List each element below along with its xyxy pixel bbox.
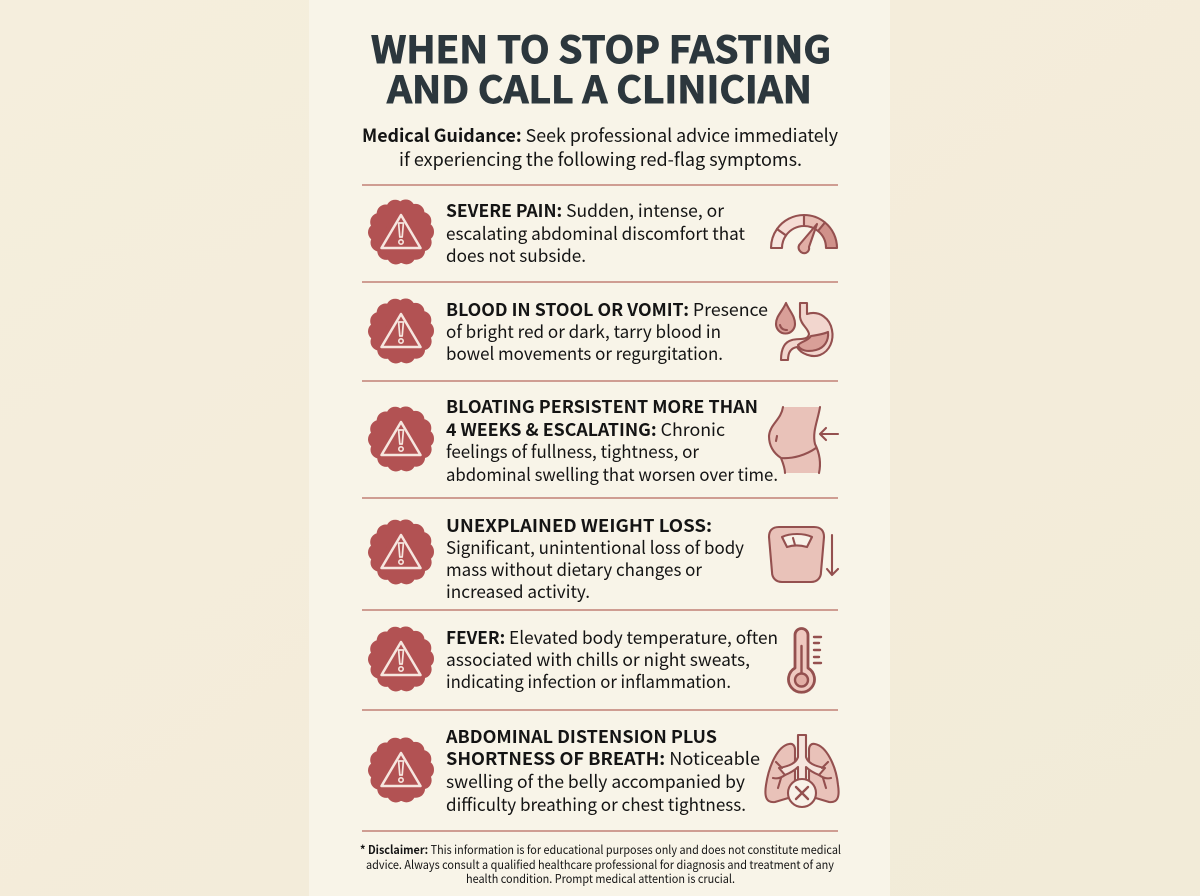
text: blood in stool or vomit: of bright red or dark, tarry blood in (446, 319, 721, 344)
icon: scale with down arrow (769, 527, 838, 582)
intro text: medical guidance (362, 122, 839, 172)
text: bloating (446, 394, 778, 487)
text: severe pain: does not subside. (446, 243, 586, 268)
icon: warning badge (370, 202, 432, 262)
text: distension and breath (445, 724, 760, 817)
text: fever (446, 625, 778, 694)
disclaimer (360, 841, 841, 887)
text: blood in stool or vomit: bowel movements or regurgitation. (446, 341, 723, 366)
icon: lungs with cross (765, 735, 839, 807)
disclaimer: * Disclaimer: This information is for educational purposes only and does not constitute medical (360, 841, 841, 858)
title: WHEN TO STOP FASTING (371, 20, 831, 74)
icon: warning badge (370, 408, 432, 470)
text: distension and breath: ABDOMINAL DISTENSION PLUS (445, 724, 717, 749)
text: fever: FEVER: Elevated body temperature, often (446, 625, 778, 650)
text: distension and breath: difficulty breathing or chest tightness. (446, 792, 746, 817)
intro text: medical guidance: if experiencing the following red-flag symptoms. (399, 146, 802, 172)
text: bloating: feelings of fullness, tightness, or (446, 439, 699, 464)
icon: swollen belly with arrow (769, 407, 838, 473)
disclaimer: health condition. Prompt medical attention is crucial. (466, 870, 735, 887)
text: fever: indicating infection or inflammation. (446, 669, 731, 694)
text: fever: associated with chills or night sweats, (446, 647, 750, 672)
intro text: medical guidance: Medical Guidance: Seek professional advice immediately (362, 122, 839, 148)
text: bloating: abdominal swelling that worsen over time. (446, 462, 778, 487)
icon: thermometer (788, 629, 821, 692)
panel: blood in stool or vomit (370, 297, 832, 366)
text: distension and breath: SHORTNESS OF BREATH: Noticeable (446, 746, 760, 771)
icon: pain gauge (771, 215, 837, 253)
title: AND CALL A CLINICIAN (386, 60, 812, 114)
text: bloating: 4 WEEKS & ESCALATING: Chronic (446, 417, 725, 442)
text: bloating: BLOATING PERSISTENT MORE THAN (446, 394, 758, 419)
title (371, 20, 831, 114)
text: unexplained weight loss (446, 513, 744, 604)
text: severe pain: SEVERE PAIN: Sudden, intense, or (446, 198, 724, 223)
panel: main card (309, 0, 890, 896)
panel: fever (370, 625, 821, 694)
icon: warning badge (370, 300, 432, 362)
text: unexplained weight loss: increased activity. (446, 579, 590, 604)
icon: warning badge (370, 740, 432, 800)
text: unexplained weight loss: mass without dietary changes or (446, 557, 702, 582)
text: unexplained weight loss: UNEXPLAINED WEIGHT LOSS: (446, 513, 712, 538)
icon: warning badge (370, 522, 432, 582)
text: blood in stool or vomit: BLOOD IN STOOL OR VOMIT: Presence (446, 297, 768, 322)
text: severe pain (446, 198, 745, 268)
text: blood in stool or vomit (446, 297, 768, 366)
text: severe pain: escalating abdominal discomfort that (446, 221, 745, 246)
icon: warning badge (370, 628, 432, 690)
text: unexplained weight loss: Significant, unintentional loss of body (446, 535, 744, 560)
panel: severe pain (370, 198, 837, 268)
disclaimer: advice. Always consult a qualified healthcare professional for diagnosis and treatment of any (366, 856, 834, 873)
text: distension and breath: swelling of the belly accompanied by (446, 769, 745, 794)
panel: bloating (370, 394, 838, 487)
panel: abdominal distension plus shortness of breath (370, 724, 839, 817)
icon: blood drop and stomach (776, 303, 832, 360)
panel: unexplained weight loss (370, 513, 838, 604)
